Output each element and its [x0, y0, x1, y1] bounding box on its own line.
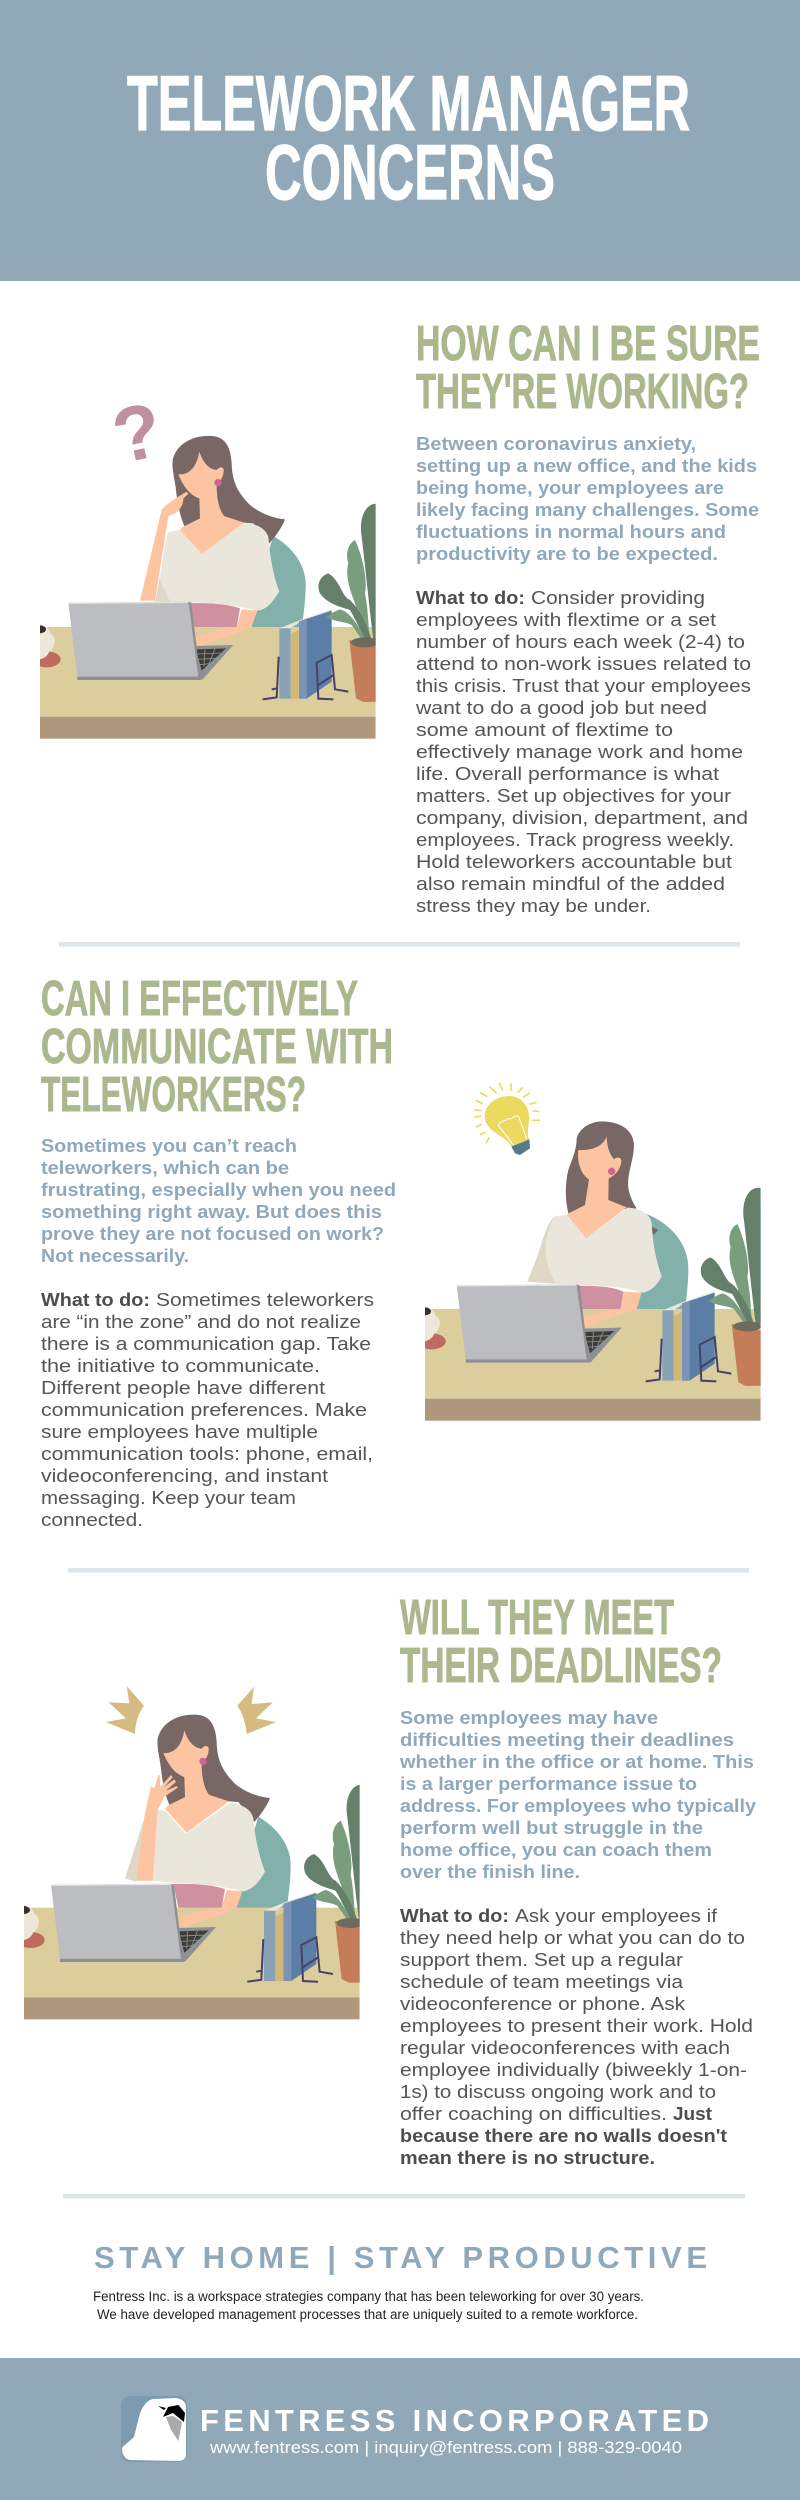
title: CONCERNS	[265, 128, 555, 216]
lead paragraph: prove they are not focused on work?	[41, 1223, 384, 1244]
what to do text: there is a communication gap. Take	[41, 1333, 371, 1354]
lead paragraph: over the finish line.	[400, 1861, 580, 1882]
desk	[40, 627, 376, 739]
lead paragraph: being home, your employees are	[416, 477, 724, 498]
footer band	[0, 2358, 800, 2500]
what to do text: videoconference or phone. Ask	[400, 1993, 686, 2014]
what to do text: employees to present their work. Hold	[400, 2015, 753, 2036]
icon: question mark: ?	[105, 387, 169, 481]
illustration: woman at desk with light bulb	[418, 1083, 762, 1421]
what to do text: sure employees have multiple	[41, 1421, 318, 1442]
lead paragraph: productivity are to be expected.	[416, 543, 718, 564]
company description	[93, 2289, 644, 2322]
what to do text: mean there is no structure.	[400, 2147, 655, 2168]
company name: FENTRESS INCORPORATED	[200, 2403, 709, 2438]
icon: light bulb	[474, 1083, 540, 1155]
what to do text: support them. Set up a regular	[400, 1949, 683, 1970]
heading: CAN I EFFECTIVELY	[41, 971, 358, 1026]
what to do text	[415, 587, 751, 916]
lead paragraph: home office, you can coach them	[400, 1839, 712, 1860]
what to do text: because there are no walls doesn't	[400, 2125, 727, 2146]
what to do text: attend to non-work issues related to	[416, 653, 751, 674]
what to do text: videoconferencing, and instant	[41, 1465, 328, 1486]
lead paragraph: difficulties meeting their deadlines	[400, 1729, 734, 1750]
what to do text: effectively manage work and home	[416, 741, 743, 762]
what to do text: are “in the zone” and do not realize	[41, 1311, 361, 1332]
title	[127, 59, 690, 216]
lead paragraph: setting up a new office, and the kids	[416, 455, 757, 476]
lead paragraph: something right away. But does this	[41, 1201, 382, 1222]
lead paragraph	[41, 1135, 396, 1266]
coffee cup	[425, 1306, 446, 1350]
illustration: stressed woman at desk	[17, 1686, 366, 2019]
what to do text: matters. Set up objectives for your	[416, 785, 731, 806]
lead paragraph: fluctuations in normal hours and	[416, 521, 726, 542]
woman with chair	[474, 1083, 688, 1328]
heading	[416, 316, 760, 419]
what to do text: some amount of flextime to	[416, 719, 673, 740]
what to do text: What to do:	[416, 587, 525, 608]
header banner	[0, 0, 800, 281]
what to do text: communication preferences. Make	[41, 1399, 367, 1420]
what to do text: Sometimes teleworkers	[156, 1289, 374, 1310]
lead paragraph: Between coronavirus anxiety,	[416, 433, 696, 454]
what to do text: company, division, department, and	[416, 807, 748, 828]
lead paragraph: perform well but struggle in the	[400, 1817, 703, 1838]
heading	[400, 1590, 722, 1693]
what to do text: messaging. Keep your team	[41, 1487, 296, 1508]
lead paragraph: address. For employees who typically	[400, 1795, 757, 1816]
what to do text	[400, 1905, 753, 2168]
what to do text: Hold teleworkers accountable but	[416, 851, 732, 872]
lead paragraph	[416, 433, 759, 564]
logo: eagle	[121, 2396, 187, 2462]
what to do text: regular videoconferences with each	[400, 2037, 730, 2058]
tagline: STAY HOME | STAY PRODUCTIVE	[94, 2240, 707, 2275]
what to do text: life. Overall performance is what	[416, 763, 719, 784]
what to do text: want to do a good job but need	[415, 697, 707, 718]
panel: how can I be sure they're working	[33, 316, 760, 916]
what to do text: also remain mindful of the added	[416, 873, 725, 894]
laptop	[68, 602, 233, 680]
woman with chair	[125, 1715, 291, 1927]
what to do text: Ask your employees if	[515, 1905, 718, 1926]
what to do text: stress they may be under.	[416, 895, 651, 916]
desk	[425, 1309, 761, 1421]
books	[646, 1291, 731, 1381]
what to do text: connected.	[41, 1509, 143, 1530]
lead paragraph: Not necessarily.	[41, 1245, 189, 1266]
company description: Fentress Inc. is a workspace strategies company that has been teleworking for over 30 years.	[93, 2289, 644, 2304]
books	[263, 609, 348, 699]
lead paragraph: whether in the office or at home. This	[399, 1751, 754, 1772]
what to do text: What to do:	[400, 1905, 509, 1926]
plant	[304, 1784, 366, 1983]
books	[247, 1892, 333, 1982]
plant	[318, 504, 380, 702]
what to do text: this crisis. Trust that your employees	[416, 675, 751, 696]
lead paragraph: frustrating, especially when you need	[41, 1179, 396, 1200]
lead paragraph: is a larger performance issue to	[400, 1773, 697, 1794]
coffee cup	[24, 1905, 45, 1948]
contact details: www.fentress.com | inquiry@fentress.com | 888-329-0040	[209, 2438, 682, 2457]
laptop	[457, 1284, 622, 1363]
panel: will they meet their deadlines	[17, 1590, 757, 2168]
coffee cup	[40, 624, 61, 668]
lead paragraph: likely facing many challenges. Some	[416, 499, 759, 520]
laptop	[51, 1884, 216, 1962]
company description: We have developed management processes that are uniquely suited to a remote workforce.	[97, 2307, 638, 2322]
lead paragraph	[399, 1707, 757, 1882]
heading	[41, 971, 393, 1122]
heading: TELEWORKERS?	[41, 1067, 306, 1122]
what to do text: Different people have different	[41, 1377, 325, 1398]
what to do text: What to do:	[41, 1289, 150, 1310]
what to do text: offer coaching on difficulties.	[400, 2103, 667, 2124]
lead paragraph: Some employees may have	[400, 1707, 658, 1728]
what to do text: Just	[673, 2103, 712, 2124]
what to do text: schedule of team meetings via	[400, 1971, 684, 1992]
what to do text: employees with flextime or a set	[416, 609, 716, 630]
what to do text: Consider providing	[531, 587, 705, 608]
what to do text: employees. Track progress weekly.	[416, 829, 734, 850]
what to do text: employee individually (biweekly 1-on-	[400, 2059, 747, 2080]
lead paragraph: Sometimes you can’t reach	[41, 1135, 297, 1156]
what to do text: number of hours each week (2-4) to	[416, 631, 745, 652]
plant	[701, 1188, 762, 1386]
panel: can I effectively communicate	[41, 971, 762, 1530]
chair	[252, 536, 306, 627]
what to do text: 1s) to discuss ongoing work and to	[400, 2081, 716, 2102]
what to do text: the initiative to communicate.	[41, 1355, 320, 1376]
woman	[140, 436, 285, 647]
heading: COMMUNICATE WITH	[41, 1019, 393, 1074]
what to do text	[41, 1289, 374, 1530]
icon: stress sparks	[106, 1686, 276, 1734]
desk	[24, 1908, 360, 2019]
what to do text: communication tools: phone, email,	[41, 1443, 373, 1464]
what to do text: they need help or what you can do to	[400, 1927, 745, 1948]
lead paragraph: teleworkers, which can be	[41, 1157, 289, 1178]
illustration: woman thinking at desk with question mark	[33, 387, 380, 739]
